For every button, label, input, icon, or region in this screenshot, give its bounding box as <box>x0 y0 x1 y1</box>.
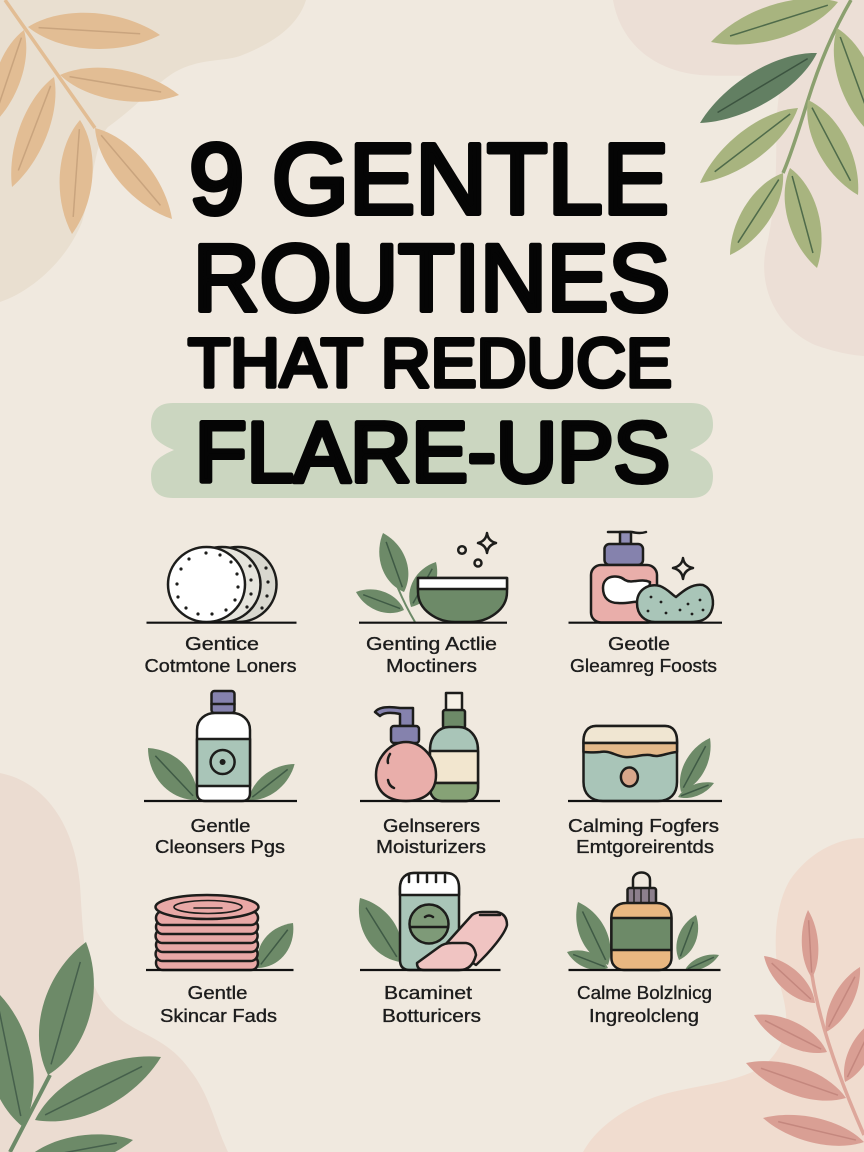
label <box>144 634 296 676</box>
item 4: cleanser bottle <box>137 691 301 857</box>
item 3: pump bottle and sponge <box>568 532 722 676</box>
divider line <box>146 969 294 971</box>
label: Ingreolcleng <box>589 1006 699 1026</box>
divider line <box>359 622 507 624</box>
label: Calming Fogfers <box>568 816 719 836</box>
label: Gentle <box>188 983 248 1003</box>
item 8: tube and pad <box>347 873 507 1026</box>
divider line <box>568 622 722 624</box>
label: Botturicers <box>382 1006 481 1026</box>
leaf spray: top right green <box>691 0 864 272</box>
divider line <box>144 800 297 802</box>
label: Cotmtone Loners <box>144 656 296 676</box>
divider line <box>146 622 296 624</box>
title: 9 GENTLE <box>189 124 669 236</box>
icon: bowl and leaves <box>352 529 507 622</box>
label: Emtgoreirentds <box>576 837 714 857</box>
background blob: bottom left <box>0 773 228 1152</box>
label <box>568 816 719 857</box>
leaf spray: top left tan <box>0 0 184 235</box>
label <box>570 634 717 676</box>
title <box>151 124 713 500</box>
label: Geotle <box>608 634 670 654</box>
item 2: bowl with leaves <box>352 529 507 676</box>
item 1: cotton pads <box>144 547 296 676</box>
icon: pump bottle and sponge <box>591 532 713 622</box>
item 5: pump and bottle <box>360 693 500 857</box>
label: Skincar Fads <box>160 1006 277 1026</box>
label: Moisturizers <box>376 837 486 857</box>
label <box>155 816 285 857</box>
icon: cotton pads <box>168 547 276 622</box>
divider line <box>568 800 722 802</box>
divider line <box>568 969 720 971</box>
label: Moctiners <box>386 656 477 676</box>
leaf spray: bottom left green <box>0 935 170 1152</box>
label <box>382 983 481 1026</box>
item 6: calming jar <box>568 726 722 857</box>
label: Gelnserers <box>383 816 480 836</box>
icon: bottle with leaves <box>137 691 301 810</box>
label: Bcaminet <box>384 983 472 1003</box>
background blob: bottom right <box>583 838 864 1152</box>
label <box>160 983 277 1026</box>
label <box>376 816 486 857</box>
icon: jar <box>584 726 719 802</box>
label <box>577 983 712 1026</box>
label: Gleamreg Foosts <box>570 656 717 676</box>
divider line <box>360 969 500 971</box>
icon: stack of pads <box>156 895 303 976</box>
label <box>366 634 497 676</box>
background blob: top left <box>0 0 306 302</box>
label: Genting Actlie <box>366 634 497 654</box>
background blob: top right <box>613 0 864 356</box>
item 9: dropper bottle <box>564 872 721 1026</box>
title: ROUTINES <box>193 226 670 332</box>
label: Gentice <box>185 634 259 654</box>
leaf spray: bottom right pink <box>741 910 864 1152</box>
label: Gentle <box>190 816 250 836</box>
icon: tube and pads <box>347 873 507 970</box>
label: Cleonsers Pgs <box>155 837 285 857</box>
label: Calme Bolzlnicg <box>577 983 712 1003</box>
icon: pump and bottle <box>375 693 478 801</box>
title: THAT REDUCE <box>188 324 672 402</box>
highlight banner <box>151 403 713 498</box>
divider line <box>360 800 500 802</box>
icon: dropper bottle with leaves <box>564 872 721 975</box>
item 7: pad stack <box>146 895 303 1026</box>
title: FLARE-UPS <box>195 406 670 500</box>
